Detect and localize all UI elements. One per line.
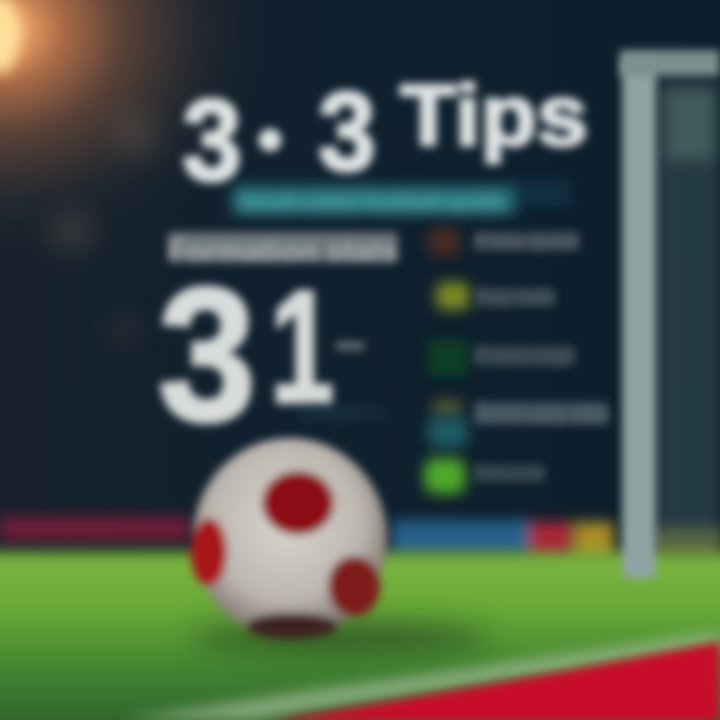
title: 3: [182, 75, 242, 205]
crossbar: [620, 50, 720, 76]
tip row 4: Shoot early often: [476, 402, 610, 427]
small caption under number: players: [300, 401, 385, 423]
ball patch top: [262, 471, 334, 535]
large number: 1: [270, 257, 334, 436]
stadium advertising strip: [0, 516, 720, 562]
tip row 2: [436, 282, 556, 310]
tip row 1: [428, 228, 581, 256]
post: [622, 58, 656, 578]
teal subtitle: [232, 180, 570, 215]
night sky background: [0, 0, 720, 560]
net: [655, 80, 720, 550]
tip row 3: Press high: [476, 345, 576, 367]
title: Tips: [400, 68, 588, 164]
tip row 5: Recover: [476, 463, 546, 485]
stadium light glow: [0, 0, 300, 320]
grass field: [0, 552, 720, 720]
large number: [158, 249, 364, 461]
ball patch left: [191, 518, 227, 586]
ball shadow: [190, 622, 490, 654]
section heading: Formation stats: [168, 233, 398, 269]
tip row 4: [428, 400, 610, 448]
teal subtitle: Small-sided football guide: [240, 193, 504, 215]
tip row 5: [424, 458, 546, 494]
bokeh spots: [50, 113, 157, 342]
soccer ball: [191, 438, 387, 639]
large number: 3: [158, 249, 256, 461]
title: 3: [318, 69, 376, 194]
goal post and net: [620, 50, 720, 578]
ball patch bottom: [246, 613, 338, 639]
ball patch right: [328, 556, 380, 616]
tip row 2: Stay wide: [476, 287, 556, 309]
pitch red border: [120, 632, 720, 720]
tip row 3: [428, 340, 576, 376]
tip row 1: Pass quick: [476, 231, 581, 253]
list of tips: [424, 228, 610, 494]
title: [182, 68, 588, 205]
